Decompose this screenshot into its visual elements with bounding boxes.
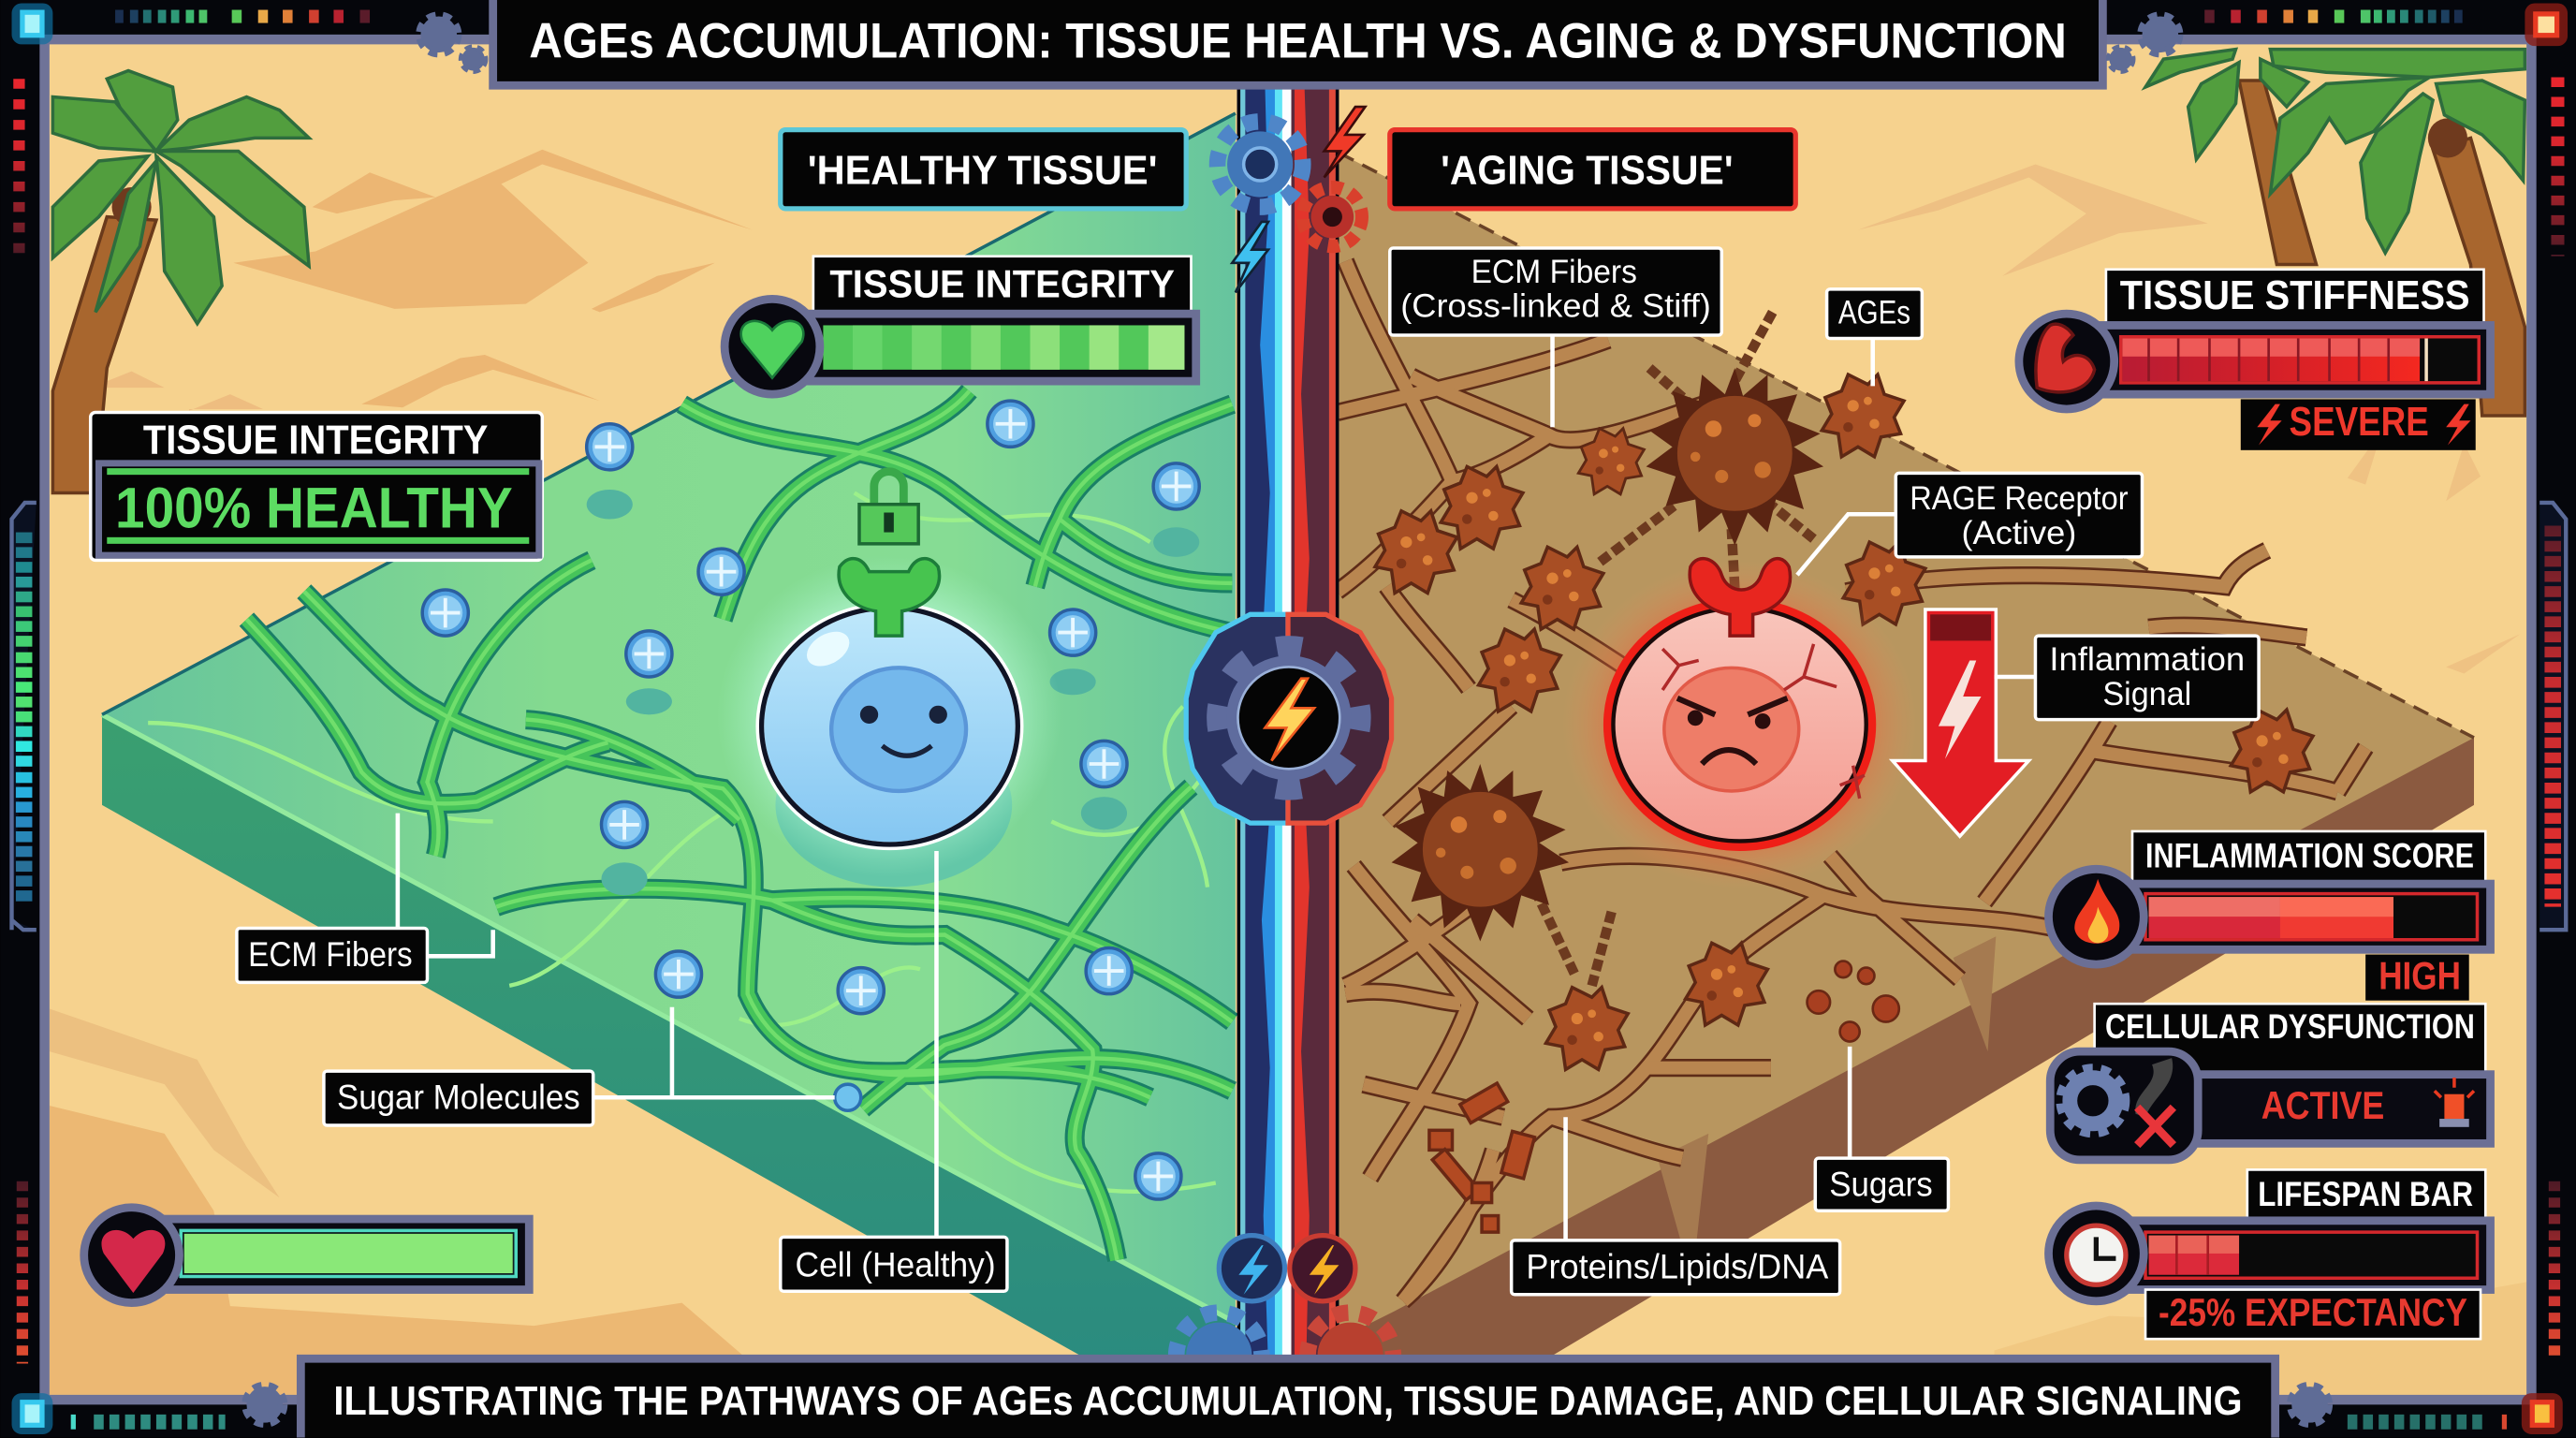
- red fill: [2122, 338, 2428, 381]
- title text: AGEs ACCUMULATION: TISSUE HEALTH VS. AGING & DYSFUNCTION: [529, 13, 2067, 68]
- severe tag: [2241, 399, 2476, 450]
- dune: pale patches: [107, 372, 263, 411]
- ECM fibers healthy: [246, 391, 1232, 1260]
- gauge: tissue stiffness: TISSUE STIFFNESS: [2120, 272, 2470, 318]
- label: sugars: Sugars: [1829, 1166, 1933, 1204]
- front edge highlight: [102, 714, 1236, 1323]
- icon: muscle arm: [2036, 324, 2095, 392]
- dune: streak: [592, 263, 715, 312]
- gauge: tissue integrity top: [724, 257, 1196, 394]
- slab side: [102, 714, 1236, 1395]
- icon: flame: [2074, 879, 2119, 944]
- nucleus: [1664, 668, 1799, 791]
- slab side: [1339, 738, 2474, 1395]
- fronds: [2145, 50, 2525, 253]
- cell shadow: [775, 723, 1012, 888]
- panel: tissue integrity: [91, 412, 542, 560]
- top right LEDs: [2204, 10, 2463, 23]
- dune: right back: [1858, 164, 2208, 276]
- back trunk: [2239, 81, 2317, 265]
- gauge: lifespan bar: LIFESPAN BAR: [2258, 1175, 2473, 1213]
- back edge outline: [1339, 153, 2474, 738]
- gear: [1218, 647, 1359, 788]
- panel: tissue integrity: 100% HEALTHY: [115, 476, 513, 540]
- title gears: [420, 17, 2178, 70]
- label: proteins lipids DNA: [1512, 1117, 1840, 1295]
- back edge outline: [102, 113, 1236, 714]
- spiked AGEs with chains: [1392, 312, 1823, 986]
- shaded cracks: [1658, 936, 1996, 1282]
- green bar: [823, 325, 1184, 370]
- icon: broken gear: [2060, 1058, 2174, 1145]
- label: cell healthy: Cell (Healthy): [796, 1246, 996, 1284]
- footer gears: [246, 1387, 2328, 1423]
- label: cell healthy: [781, 851, 1007, 1291]
- red fill: [2149, 897, 2393, 938]
- dune: left lower: [361, 355, 600, 407]
- dune: left back: [233, 150, 753, 309]
- angry face: [1677, 698, 1787, 764]
- face: [860, 706, 947, 756]
- gauge: health bottom left: [84, 1208, 529, 1303]
- red fill: [2149, 1236, 2239, 1275]
- right red LEDs: [2554, 77, 2561, 257]
- gauge: cellular dysfunction: [2050, 1004, 2491, 1160]
- expectancy tag: -25% EXPECTANCY: [2159, 1290, 2467, 1334]
- central gear emblem: [1186, 614, 1392, 823]
- left teal gauge: [11, 503, 37, 930]
- palm tree left: [52, 70, 309, 492]
- left red LEDs: [16, 79, 22, 257]
- glow: [1562, 560, 1917, 888]
- sand: bottom left dark: [50, 1106, 789, 1395]
- label: ECM fibers stiff: ECM Fibers: [1471, 254, 1637, 290]
- gauge: cellular dysfunction: ACTIVE: [2261, 1083, 2384, 1127]
- label: proteins lipids DNA: Proteins/Lipids/DNA: [1526, 1247, 1829, 1285]
- healthy cell: [716, 472, 1061, 877]
- gauge: cellular dysfunction: CELLULAR DYSFUNCTION: [2105, 1007, 2475, 1046]
- protein fragments: [1429, 1083, 1534, 1232]
- sand: bottom left light band: [50, 1008, 280, 1197]
- label: ECM fibers stiff: (Cross-linked & Stiff): [1400, 288, 1711, 325]
- inflammation arrow: [1893, 609, 2028, 836]
- nucleus: [831, 668, 966, 791]
- front trunk: [2433, 138, 2525, 416]
- label: sugar molecules: [324, 1007, 835, 1125]
- heading: aging tissue: 'AGING TISSUE': [1441, 148, 1734, 194]
- label: inflammation signal: Signal: [2102, 676, 2191, 712]
- gauge: inflammation score: INFLAMMATION SCORE: [2145, 837, 2474, 875]
- cell body: [1608, 603, 1871, 846]
- high tag: HIGH: [2378, 953, 2461, 997]
- blue half: [1237, 85, 1290, 1367]
- glow: [716, 555, 1061, 877]
- label: sugar molecules: Sugar Molecules: [337, 1078, 580, 1117]
- label: sugars: [1815, 1047, 1948, 1211]
- sand: lower right: [1995, 1282, 2530, 1395]
- right dark LEDs: [2551, 1181, 2557, 1362]
- receptor: [1690, 559, 1791, 636]
- panel: tissue integrity: TISSUE INTEGRITY: [143, 417, 488, 462]
- label: ECM fibers healthy: ECM Fibers: [248, 935, 413, 974]
- slab top: [1339, 153, 2474, 1339]
- heart icon: [741, 321, 803, 378]
- right red gauge: [2539, 503, 2566, 930]
- severe tag: SEVERE: [2290, 399, 2429, 445]
- blue bolt: [1232, 222, 1268, 292]
- ECM fibers stiff: [1338, 261, 2365, 1301]
- trunk: [52, 217, 156, 492]
- aging tissue slab: [1338, 153, 2474, 1395]
- label: RAGE receptor: (Active): [1961, 515, 2076, 551]
- heading: healthy tissue: 'HEALTHY TISSUE': [808, 148, 1157, 194]
- label: ECM fibers stiff: [1390, 248, 1721, 427]
- icon: clock: [2067, 1225, 2126, 1284]
- sand: right streaks: [2348, 431, 2520, 673]
- label: RAGE receptor: [1797, 473, 2143, 575]
- bottom left LEDs: [71, 1415, 226, 1430]
- label: AGEs: [1827, 289, 1922, 386]
- bottom right LEDs: [2348, 1415, 2507, 1430]
- heading: healthy tissue: [781, 130, 1186, 209]
- bottom center gears and bolts: [1177, 1236, 1393, 1398]
- fronds: [52, 70, 309, 324]
- crown: [2428, 118, 2467, 157]
- dune: left small: [313, 172, 435, 213]
- lock: [859, 472, 918, 544]
- cell body: [760, 607, 1019, 846]
- slab top: [102, 113, 1236, 1323]
- label: AGEs: AGEs: [1838, 295, 1910, 331]
- receptor: [839, 559, 940, 636]
- gauge: inflammation score: [2048, 831, 2491, 1001]
- gauge: lifespan bar: [2048, 1169, 2491, 1339]
- aging cell: [1562, 559, 1917, 888]
- gauge: tissue stiffness: [2019, 270, 2491, 450]
- sugar molecules: [422, 401, 1199, 1199]
- heart icon: [101, 1230, 165, 1293]
- bolt: [1265, 679, 1314, 760]
- crown: [112, 187, 152, 227]
- footer text: ILLUSTRATING THE PATHWAYS OF AGEs ACCUMULATION, TISSUE DAMAGE, AND CELLULAR SIGNALING: [333, 1378, 2243, 1424]
- left lower LEDs: [19, 1181, 25, 1364]
- top left LEDs: [115, 10, 370, 23]
- top center gears: [1218, 107, 1365, 292]
- label: inflammation signal: Inflammation: [2049, 641, 2245, 678]
- label: RAGE receptor: RAGE Receptor: [1910, 480, 2129, 517]
- chains: [1534, 312, 1814, 986]
- title banner: [420, 0, 2178, 85]
- label: inflammation signal: [1995, 636, 2259, 720]
- palm trees right: [2145, 50, 2525, 416]
- label: ECM fibers healthy: [237, 814, 493, 982]
- red gear: [1303, 187, 1362, 246]
- sugar dots aging: [1808, 961, 1899, 1042]
- icon: alarm: [2435, 1078, 2474, 1127]
- blue gear: [1218, 122, 1303, 207]
- gauge: tissue integrity top: TISSUE INTEGRITY: [829, 262, 1175, 306]
- surface veins: [148, 492, 1229, 1192]
- cracks: [1662, 644, 1865, 799]
- red bolt: [1325, 107, 1365, 178]
- red half: [1292, 85, 1339, 1367]
- heading: aging tissue: [1390, 130, 1795, 209]
- AGE clusters: [1375, 374, 2313, 1069]
- healthy tissue slab: [102, 113, 1236, 1395]
- footer banner: [246, 1358, 2328, 1437]
- highlight: [800, 624, 856, 673]
- center divider: [1237, 85, 1339, 1367]
